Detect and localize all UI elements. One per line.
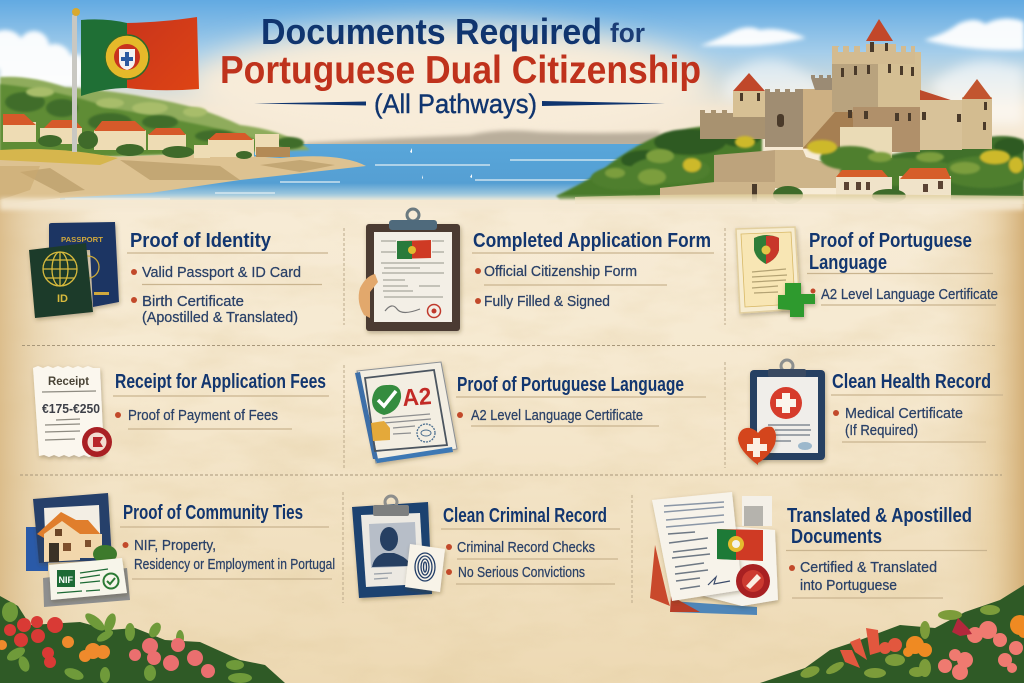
panel: proof of identity: [29, 222, 328, 326]
bullet: Residency or Employment in Portugal: [134, 556, 335, 573]
bullets: [131, 264, 301, 326]
panel: proof of Portuguese language, top: [736, 227, 998, 317]
bullet: A2 Level Language Certificate: [821, 286, 998, 303]
bullets: Birth Certificate: [142, 293, 244, 310]
scene: castle on green hill: [556, 19, 1024, 204]
cottages: [575, 168, 1024, 204]
icon: Portuguese flag on pole: [72, 8, 199, 152]
flowers: bottom left: [0, 596, 285, 683]
icon: certificate with green cross: [736, 227, 815, 317]
scene: sky and clouds: [0, 0, 1024, 150]
icon: house and NIF card: [26, 493, 130, 607]
heading: Translated & Apostilled: [787, 505, 972, 527]
bullets: Valid Passport & ID Card: [142, 264, 301, 281]
bullets: [446, 539, 595, 581]
title: Documents Required: [261, 11, 602, 52]
bullet: (If Required): [845, 422, 918, 439]
icon: passport and ID: ID: [57, 293, 68, 305]
scene: coast and sea: [60, 131, 660, 200]
castle walls: [660, 19, 992, 204]
icon: receipt: Receipt: [48, 374, 89, 388]
bullet: [789, 559, 937, 594]
scene: cliffs: [0, 149, 366, 205]
icon: medical clipboard with heart: [738, 360, 825, 465]
bullets: Criminal Record Checks: [457, 539, 595, 556]
panel: proof of community ties: [26, 493, 335, 607]
panel: proof of Portuguese language, middle: [355, 362, 706, 463]
heading: Proof of Portuguese Language: [457, 374, 684, 396]
icon: passport and ID: [29, 222, 119, 318]
green bushes: [591, 136, 1024, 190]
title: [220, 11, 701, 119]
panel: completed application form: [359, 209, 714, 331]
icon: document stack with flag and seal: [650, 492, 778, 615]
icon: passport and ID: PASSPORT: [61, 235, 103, 244]
icon: clipboard with silhouette and fingerprint: [352, 496, 445, 598]
bullet: [122, 537, 335, 573]
icon: house and NIF card: NIF: [58, 575, 74, 585]
panel: clean criminal record: [352, 496, 620, 598]
icon: A2 certificate: A2: [402, 383, 432, 412]
panel: proof of Portuguese language, top: Language: [809, 252, 887, 274]
heading: Clean Criminal Record: [443, 505, 607, 527]
bullet: into Portuguese: [800, 577, 897, 594]
heading: Clean Health Record: [832, 371, 991, 393]
heading: Proof of Community Ties: [123, 502, 303, 524]
heading: Proof of Identity: [130, 230, 272, 252]
bullet: Certified & Translated: [800, 559, 937, 576]
bullets: Official Citizenship Form: [484, 263, 637, 280]
scene: village houses: [3, 114, 290, 159]
bullet: A2 Level Language Certificate: [471, 407, 643, 424]
bullet: [833, 405, 963, 439]
heading: Receipt for Application Fees: [115, 371, 326, 393]
flowers: bottom right: [760, 585, 1024, 683]
title: Portuguese Dual Citizenship: [220, 49, 701, 92]
icon: A2 certificate: [355, 362, 457, 463]
bullets: Fully Filled & Signed: [484, 293, 610, 310]
bullet: Proof of Payment of Fees: [128, 407, 278, 424]
title: (All Pathways): [374, 89, 537, 119]
bullets: [475, 263, 637, 310]
rear trees: [556, 123, 1024, 200]
icon: clipboard with form: [359, 209, 460, 331]
bullet: Medical Certificate: [845, 405, 963, 422]
bullets: No Serious Convictions: [458, 564, 585, 581]
bullets: (Apostilled & Translated): [142, 309, 298, 326]
heading: Completed Application Form: [473, 230, 711, 252]
panel: translated and apostilled documents: Documents: [791, 526, 882, 548]
icon: receipt: [33, 366, 112, 457]
icon: receipt: €175-€250: [42, 401, 100, 416]
panel: translated and apostilled documents: [650, 492, 987, 615]
title: for: [610, 18, 645, 48]
soft fade from scene into parchment: [0, 198, 1024, 210]
panel: receipt for application fees: [33, 366, 329, 457]
dividers: [20, 228, 1002, 605]
heading: Proof of Portuguese: [809, 230, 972, 252]
scene: green hillside: [0, 77, 310, 160]
bullet: NIF, Property,: [134, 537, 216, 554]
panel: clean health record: [738, 360, 1003, 465]
